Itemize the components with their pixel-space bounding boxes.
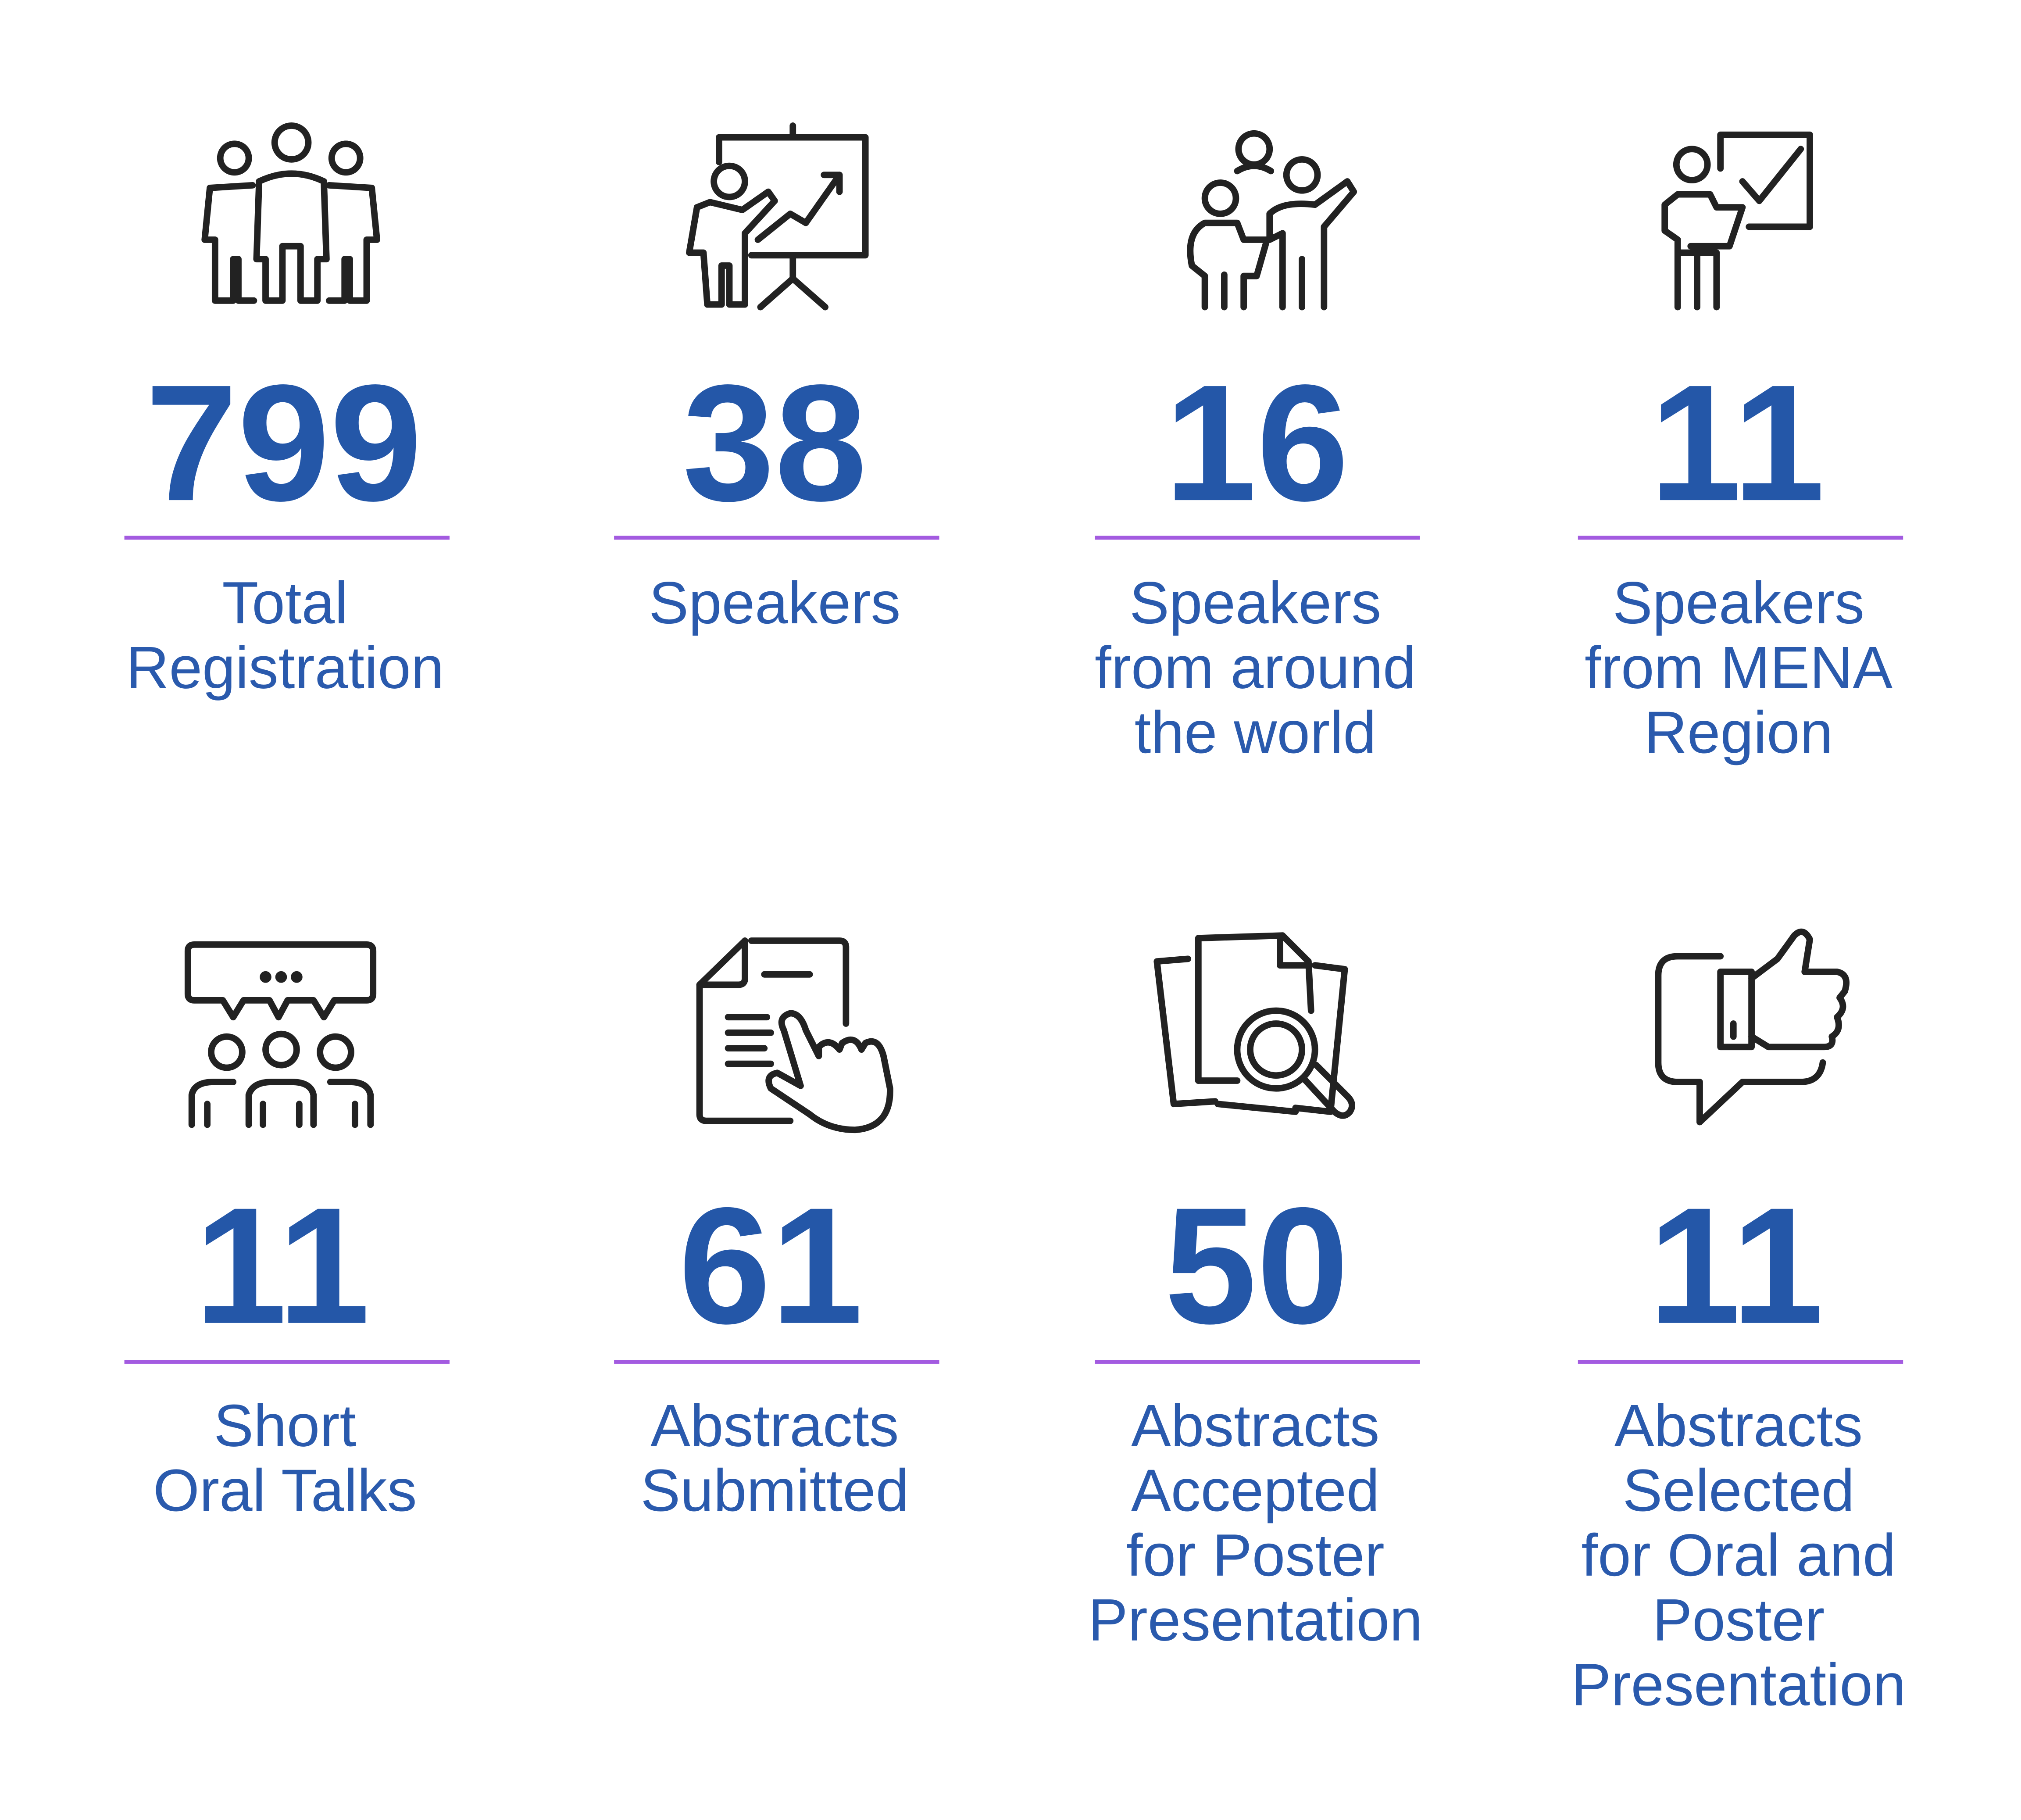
stat: 50 Abstracts Accepted for Poster Presentation: for Poster xyxy=(1126,1522,1385,1588)
stat: 799 Total Registration: 799 xyxy=(145,350,422,536)
stat: 61 Abstracts Submitted: 61 xyxy=(678,1173,863,1359)
stat: 11 Abstracts Selected for Oral and Poster Presentation: 11 xyxy=(1648,1173,1824,1359)
stat: 11 Abstracts Selected for Oral and Poster Presentation: Selected xyxy=(1623,1457,1854,1523)
stat: 11 Abstracts Selected for Oral and Poster Presentation: Abstracts xyxy=(1614,1392,1863,1459)
stat: 61 Abstracts Submitted: Submitted xyxy=(641,1457,909,1523)
stat: 50 Abstracts Accepted for Poster Presentation: 50 xyxy=(1164,1173,1349,1359)
stat: 50 Abstracts Accepted for Poster Presentation xyxy=(1088,1173,1423,1653)
icon: presenter with chart xyxy=(689,126,865,307)
icon: speakers around the world xyxy=(1190,133,1354,307)
stat: 16 Speakers from around the world: Speakers xyxy=(1129,569,1381,636)
stat: 16 Speakers from around the world xyxy=(1095,350,1420,765)
stat: 11 Abstracts Selected for Oral and Poster Presentation xyxy=(1571,1173,1906,1718)
icon: group of people xyxy=(205,126,377,300)
stat: 50 Abstracts Accepted for Poster Presentation: Presentation xyxy=(1088,1587,1423,1653)
stat: 38 Speakers: 38 xyxy=(682,350,867,536)
stat: 799 Total Registration: Registration xyxy=(126,634,444,701)
stat: 61 Abstracts Submitted: Abstracts xyxy=(650,1392,899,1459)
stat: 11 Speakers from MENA Region xyxy=(1578,350,1903,765)
stat: 11 Speakers from MENA Region: Region xyxy=(1644,699,1833,765)
stat: 16 Speakers from around the world: the world xyxy=(1135,699,1376,765)
icon: document with pointing hand xyxy=(700,941,890,1130)
stat: 11 Short Oral Talks: Short xyxy=(214,1392,356,1459)
stat: 11 Short Oral Talks xyxy=(125,1173,450,1523)
stat: 61 Abstracts Submitted xyxy=(614,1173,939,1523)
stat: 11 Abstracts Selected for Oral and Poster Presentation: Presentation xyxy=(1571,1651,1906,1718)
stat: 11 Abstracts Selected for Oral and Poster Presentation: Poster xyxy=(1653,1587,1825,1653)
stat: 38 Speakers xyxy=(614,350,939,636)
stat: 799 Total Registration xyxy=(125,350,450,701)
stat: 16 Speakers from around the world: from around xyxy=(1095,634,1416,701)
stat: 38 Speakers: Speakers xyxy=(649,569,900,636)
stat: 11 Short Oral Talks: 11 xyxy=(195,1173,370,1359)
stat: 11 Speakers from MENA Region: 11 xyxy=(1650,350,1825,536)
icon: group with speech bubble xyxy=(188,944,373,1125)
stat: 11 Speakers from MENA Region: from MENA xyxy=(1585,634,1892,701)
stat: 50 Abstracts Accepted for Poster Presentation: Accepted xyxy=(1131,1457,1380,1523)
stat: 50 Abstracts Accepted for Poster Presentation: Abstracts xyxy=(1131,1392,1379,1459)
stat: 11 Short Oral Talks: Oral Talks xyxy=(153,1457,417,1523)
icon: documents with magnifier xyxy=(1157,936,1352,1116)
stat: 11 Abstracts Selected for Oral and Poster Presentation: for Oral and xyxy=(1581,1522,1896,1588)
stat: 799 Total Registration: Total xyxy=(222,569,348,636)
stat: 11 Speakers from MENA Region: Speakers xyxy=(1613,569,1864,636)
icon: speaker with checkmark board xyxy=(1665,135,1810,307)
icon: speech bubble with thumbs up xyxy=(1658,932,1846,1122)
stat: 16 Speakers from around the world: 16 xyxy=(1164,350,1349,536)
